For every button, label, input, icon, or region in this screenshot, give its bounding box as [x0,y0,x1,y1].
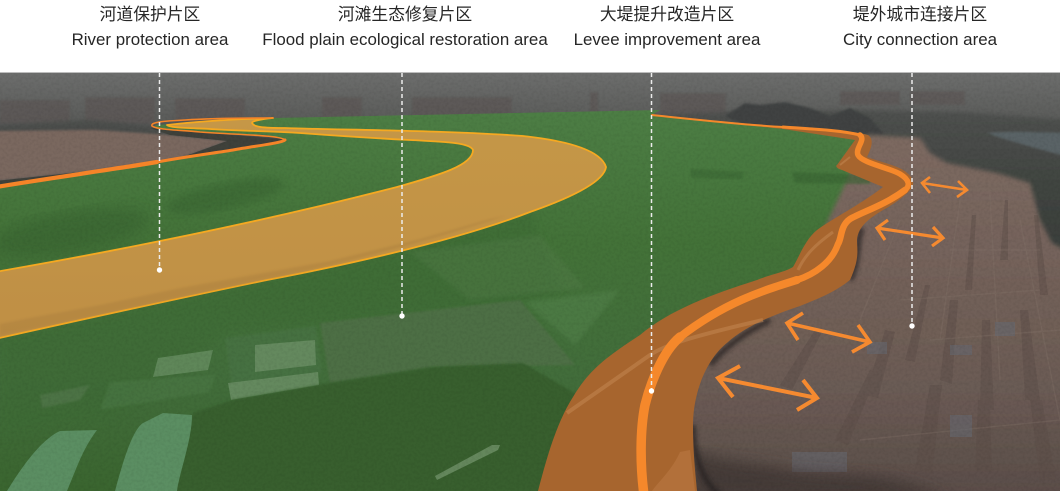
dark tree belt [0,110,1060,320]
leader line: flood plain [399,73,405,319]
levee centre line [641,115,908,491]
levee improvement band [538,115,913,491]
tree shadow inside yellow band [0,216,505,336]
label: river protection area [72,5,228,49]
label: city connection area: City connection area [843,30,997,49]
hills behind the levee [725,102,885,135]
greenhouses [7,413,192,491]
yellow zone: river protection band [0,118,606,339]
village blue roofs [792,322,1015,472]
far bank tree shadow [0,128,290,188]
village lighter streets [860,195,1060,440]
arrow 2 [877,220,943,246]
lake [987,132,1060,156]
shadow along levee foot [693,228,862,491]
label: flood plain ecological restoration area [262,5,548,49]
label: levee improvement area: 大堤提升改造片区 [600,5,734,24]
label: levee improvement area: Levee improvement area [574,30,760,49]
label: flood plain ecological restoration area: Flood plain ecological restoration area [262,30,548,49]
arrow 4 [718,366,817,410]
leader line: city connection [909,73,915,329]
label: river protection area: 河道保护片区 [100,5,200,24]
label: river protection area: River protection area [72,30,228,49]
pale road on levee [567,157,850,491]
village ground [640,135,1060,491]
far bank orange boundary [0,118,285,187]
village roof texture [780,200,1056,480]
leader line: levee [649,73,654,394]
arrow 1 [922,177,967,197]
label: city connection area [843,5,998,49]
label: levee improvement area [574,5,760,49]
green farmland detail [0,169,872,491]
connection arrows [718,177,967,410]
green flood plain [0,110,900,491]
label: flood plain ecological restoration area: 河滩生态修复片区 [338,5,472,24]
leader line: river protection [157,73,162,273]
arrow 3 [787,313,870,352]
dark foreground trees [690,450,950,491]
brown field on far bank [0,130,227,181]
label: city connection area: 堤外城市连接片区 [853,5,987,24]
